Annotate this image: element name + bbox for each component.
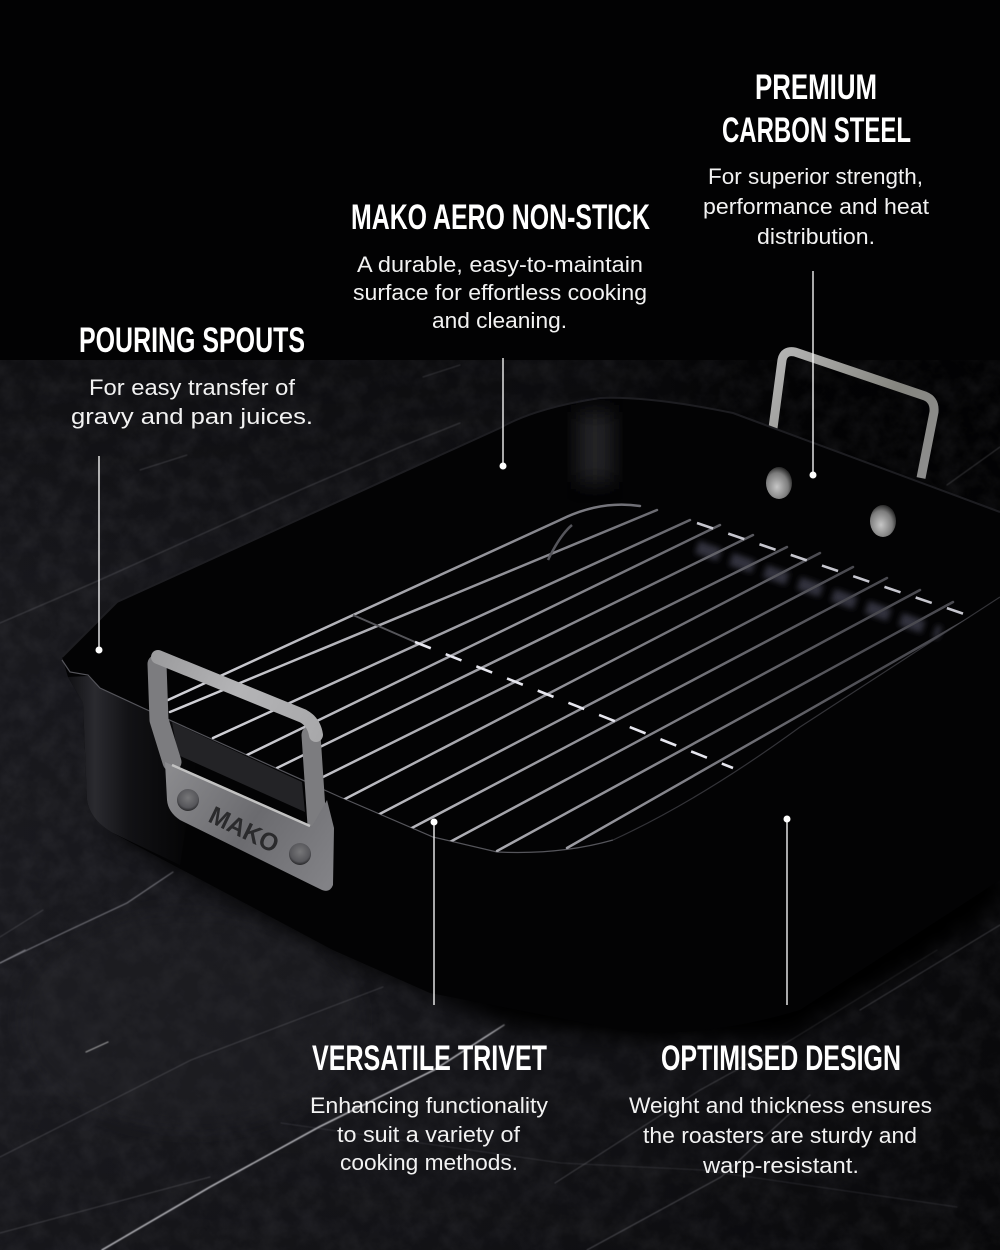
- leader line: [784, 816, 790, 1005]
- callout: versatile trivet: [310, 818, 548, 1175]
- pan outer wall highlight: [68, 676, 200, 865]
- heading: VERSATILE TRIVET: [312, 1039, 547, 1078]
- rear crossbar: [697, 523, 973, 617]
- heading: POURING SPOUTS: [79, 321, 305, 360]
- interior wall reflection: [578, 412, 612, 482]
- plate ridge: [172, 765, 310, 826]
- pan body: [62, 398, 1000, 1033]
- description: warp-resistant.: [702, 1153, 859, 1178]
- heading: CARBON STEEL: [722, 111, 911, 150]
- callout: mako aero non-stick: [351, 198, 650, 470]
- leader line: [500, 358, 506, 470]
- pan shadow: [113, 600, 1000, 1040]
- description: [71, 375, 313, 429]
- description: surface for effortless cooking: [353, 280, 647, 305]
- plate rivet left: [177, 789, 199, 811]
- description: For easy transfer of: [89, 375, 296, 400]
- description: Weight and thickness ensures: [629, 1093, 932, 1118]
- heading: OPTIMISED DESIGN: [661, 1039, 901, 1078]
- heading: MAKO AERO NON-STICK: [351, 198, 650, 237]
- description: distribution.: [757, 224, 875, 249]
- description: Enhancing functionality: [310, 1093, 548, 1118]
- description: cooking methods.: [340, 1150, 518, 1175]
- description: gravy and pan juices.: [71, 404, 313, 429]
- description: performance and heat: [703, 194, 929, 219]
- handle side bars: [157, 664, 317, 825]
- description: [310, 1093, 548, 1175]
- pan rim edge: [62, 398, 1000, 657]
- rivet: left: [766, 467, 792, 499]
- leader line: [430, 818, 438, 1005]
- handle plate: [165, 762, 334, 891]
- handle top bar: [158, 657, 316, 735]
- heading: [722, 68, 911, 150]
- brand name: MAKO: [204, 801, 283, 859]
- handle bracket: [172, 722, 305, 812]
- description: the roasters are sturdy and: [643, 1123, 917, 1148]
- rack foot: [548, 525, 572, 560]
- background: marble table: [0, 355, 1000, 1250]
- description: and cleaning.: [432, 308, 567, 333]
- front handle with MAKO plate: [157, 657, 334, 891]
- roasting pan: [62, 398, 1000, 1040]
- background: dark wall: [0, 0, 1000, 362]
- rack reflection: [697, 547, 940, 633]
- leader line: [96, 456, 102, 654]
- plate rivet right: [289, 843, 311, 865]
- description: [353, 252, 647, 333]
- description: A durable, easy-to-maintain: [357, 252, 643, 277]
- description: For superior strength,: [708, 164, 923, 189]
- callout: pouring spouts: [71, 321, 313, 654]
- description: to suit a variety of: [337, 1122, 521, 1147]
- pan front rim: [62, 597, 1000, 852]
- callout: optimised design: [629, 816, 932, 1178]
- wire rack: [168, 505, 973, 851]
- leader line: [810, 271, 816, 478]
- centre crossbar: [353, 615, 415, 642]
- rivet: right: [870, 505, 896, 537]
- rear handle: [773, 352, 934, 478]
- description: [629, 1093, 932, 1178]
- heading: PREMIUM: [755, 68, 877, 107]
- callout: premium carbon steel: [703, 68, 929, 478]
- description: [703, 164, 929, 249]
